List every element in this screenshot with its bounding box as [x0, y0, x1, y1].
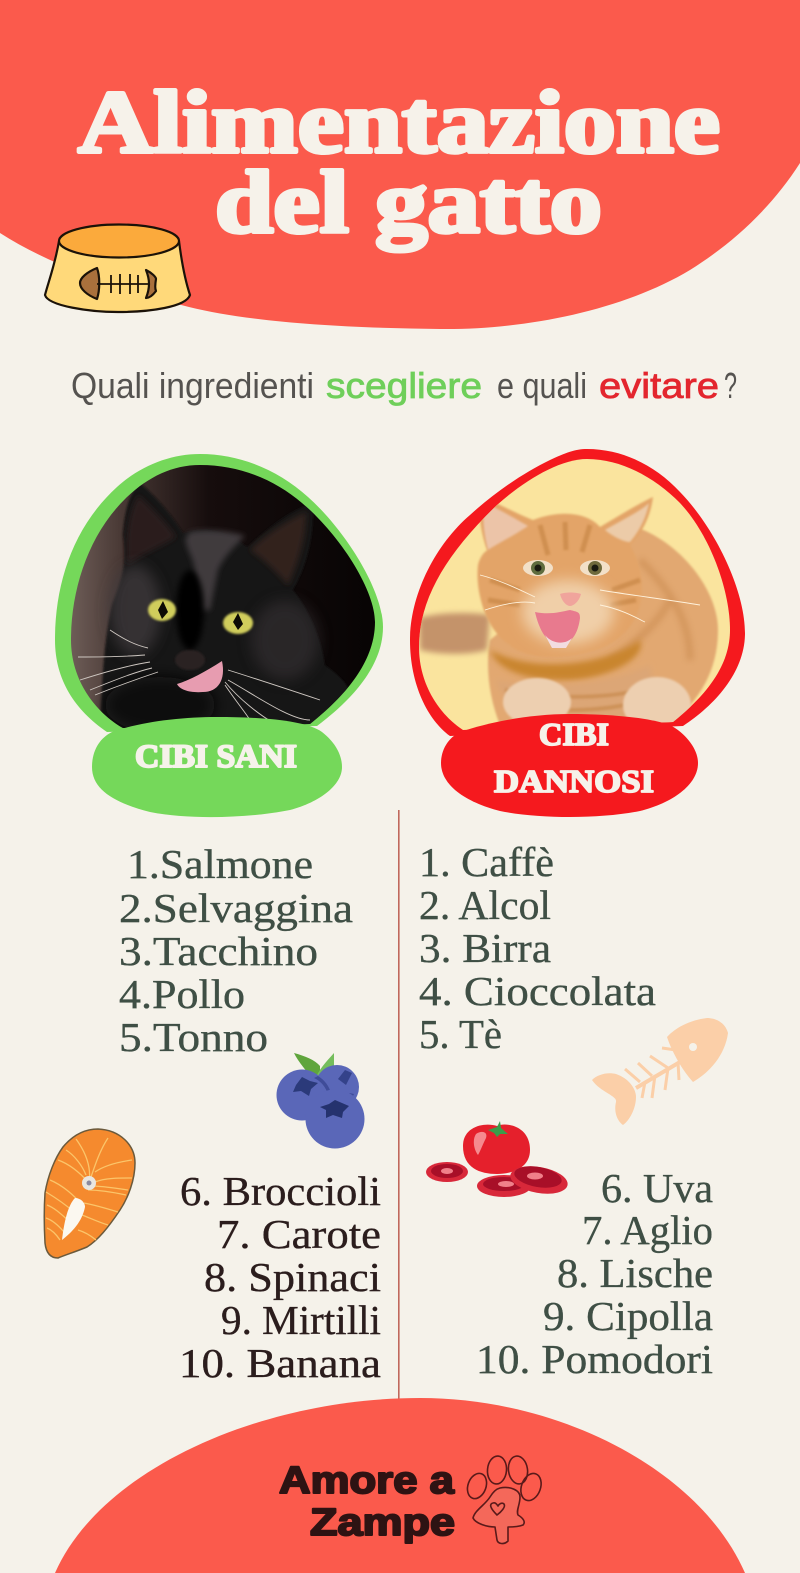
list: harmful 6-10: 9. Cipolla: [543, 1293, 713, 1339]
list: harmful 6-10: 6. Uva: [601, 1165, 713, 1211]
logo text: Zampe: [310, 1502, 455, 1544]
list: harmful 6-10: 10. Pomodori: [476, 1336, 713, 1382]
label text: cibi dannosi: CIBI: [539, 716, 609, 752]
list: healthy 1-5: [119, 841, 353, 1060]
logo: paw icon: [464, 1455, 545, 1544]
list: healthy 6-10: 9. Mirtilli: [221, 1297, 381, 1343]
icon: tomato: [426, 1121, 570, 1198]
list: healthy 1-5: 3.Tacchino: [119, 928, 318, 974]
subtitle: Quali ingredienti: [71, 365, 314, 406]
list: harmful 1-5: 1. Caffè: [419, 839, 554, 885]
icon: blueberries: [276, 1053, 364, 1148]
list: healthy 6-10: 10. Banana: [179, 1340, 381, 1386]
footer blob: [55, 1398, 745, 1573]
list: healthy 1-5: 2.Selvaggina: [119, 885, 353, 931]
list: harmful 6-10: 7. Aglio: [582, 1207, 713, 1253]
label pill: cibi sani: [92, 717, 342, 817]
divider: [398, 810, 400, 1400]
header blob: [0, 0, 800, 329]
list: healthy 6-10: 7. Carote: [217, 1211, 381, 1257]
red frame: [410, 449, 745, 736]
list: healthy 6-10: [179, 1168, 381, 1386]
green frame: [55, 454, 383, 732]
list: harmful 6-10: [476, 1165, 713, 1382]
icon: cat food bowl: [45, 224, 190, 312]
list: healthy 6-10: 8. Spinaci: [204, 1254, 381, 1300]
title: del gatto: [215, 154, 602, 252]
list: healthy 6-10: 6. Broccioli: [180, 1168, 381, 1214]
list: healthy 1-5: 5.Tonno: [119, 1014, 268, 1060]
label pill: cibi dannosi: [441, 714, 698, 817]
list: harmful 1-5: [419, 839, 656, 1057]
list: harmful 1-5: 3. Birra: [419, 925, 551, 971]
photo: black cat: [71, 465, 375, 728]
list: harmful 1-5: 5. Tè: [419, 1011, 502, 1057]
photo: ginger cat: [419, 459, 730, 730]
subtitle: e quali: [497, 365, 587, 406]
logo text: [279, 1460, 455, 1544]
icon: fish bone: [592, 1018, 728, 1125]
panel: healthy food cat: [55, 454, 390, 817]
subtitle: scegliere: [326, 365, 482, 406]
logo text: Amore a: [279, 1460, 455, 1502]
list: harmful 1-5: 4. Cioccolata: [419, 968, 656, 1014]
list: harmful 6-10: 8. Lische: [557, 1250, 713, 1296]
title: [78, 74, 720, 252]
list: healthy 1-5: 4.Pollo: [119, 971, 245, 1017]
subtitle: evitare: [599, 365, 719, 406]
icon: salmon steak: [44, 1129, 135, 1258]
label text: cibi dannosi: [494, 716, 654, 799]
subtitle: ?: [724, 365, 737, 406]
title: Alimentazione: [78, 74, 720, 172]
label text: cibi sani: CIBI SANI: [135, 739, 297, 775]
label text: cibi dannosi: DANNOSI: [494, 763, 654, 799]
subtitle: [71, 365, 737, 406]
list: harmful 1-5: 2. Alcol: [419, 882, 551, 928]
list: healthy 1-5: 1.Salmone: [127, 841, 313, 887]
panel: harmful food cat: [410, 449, 745, 817]
